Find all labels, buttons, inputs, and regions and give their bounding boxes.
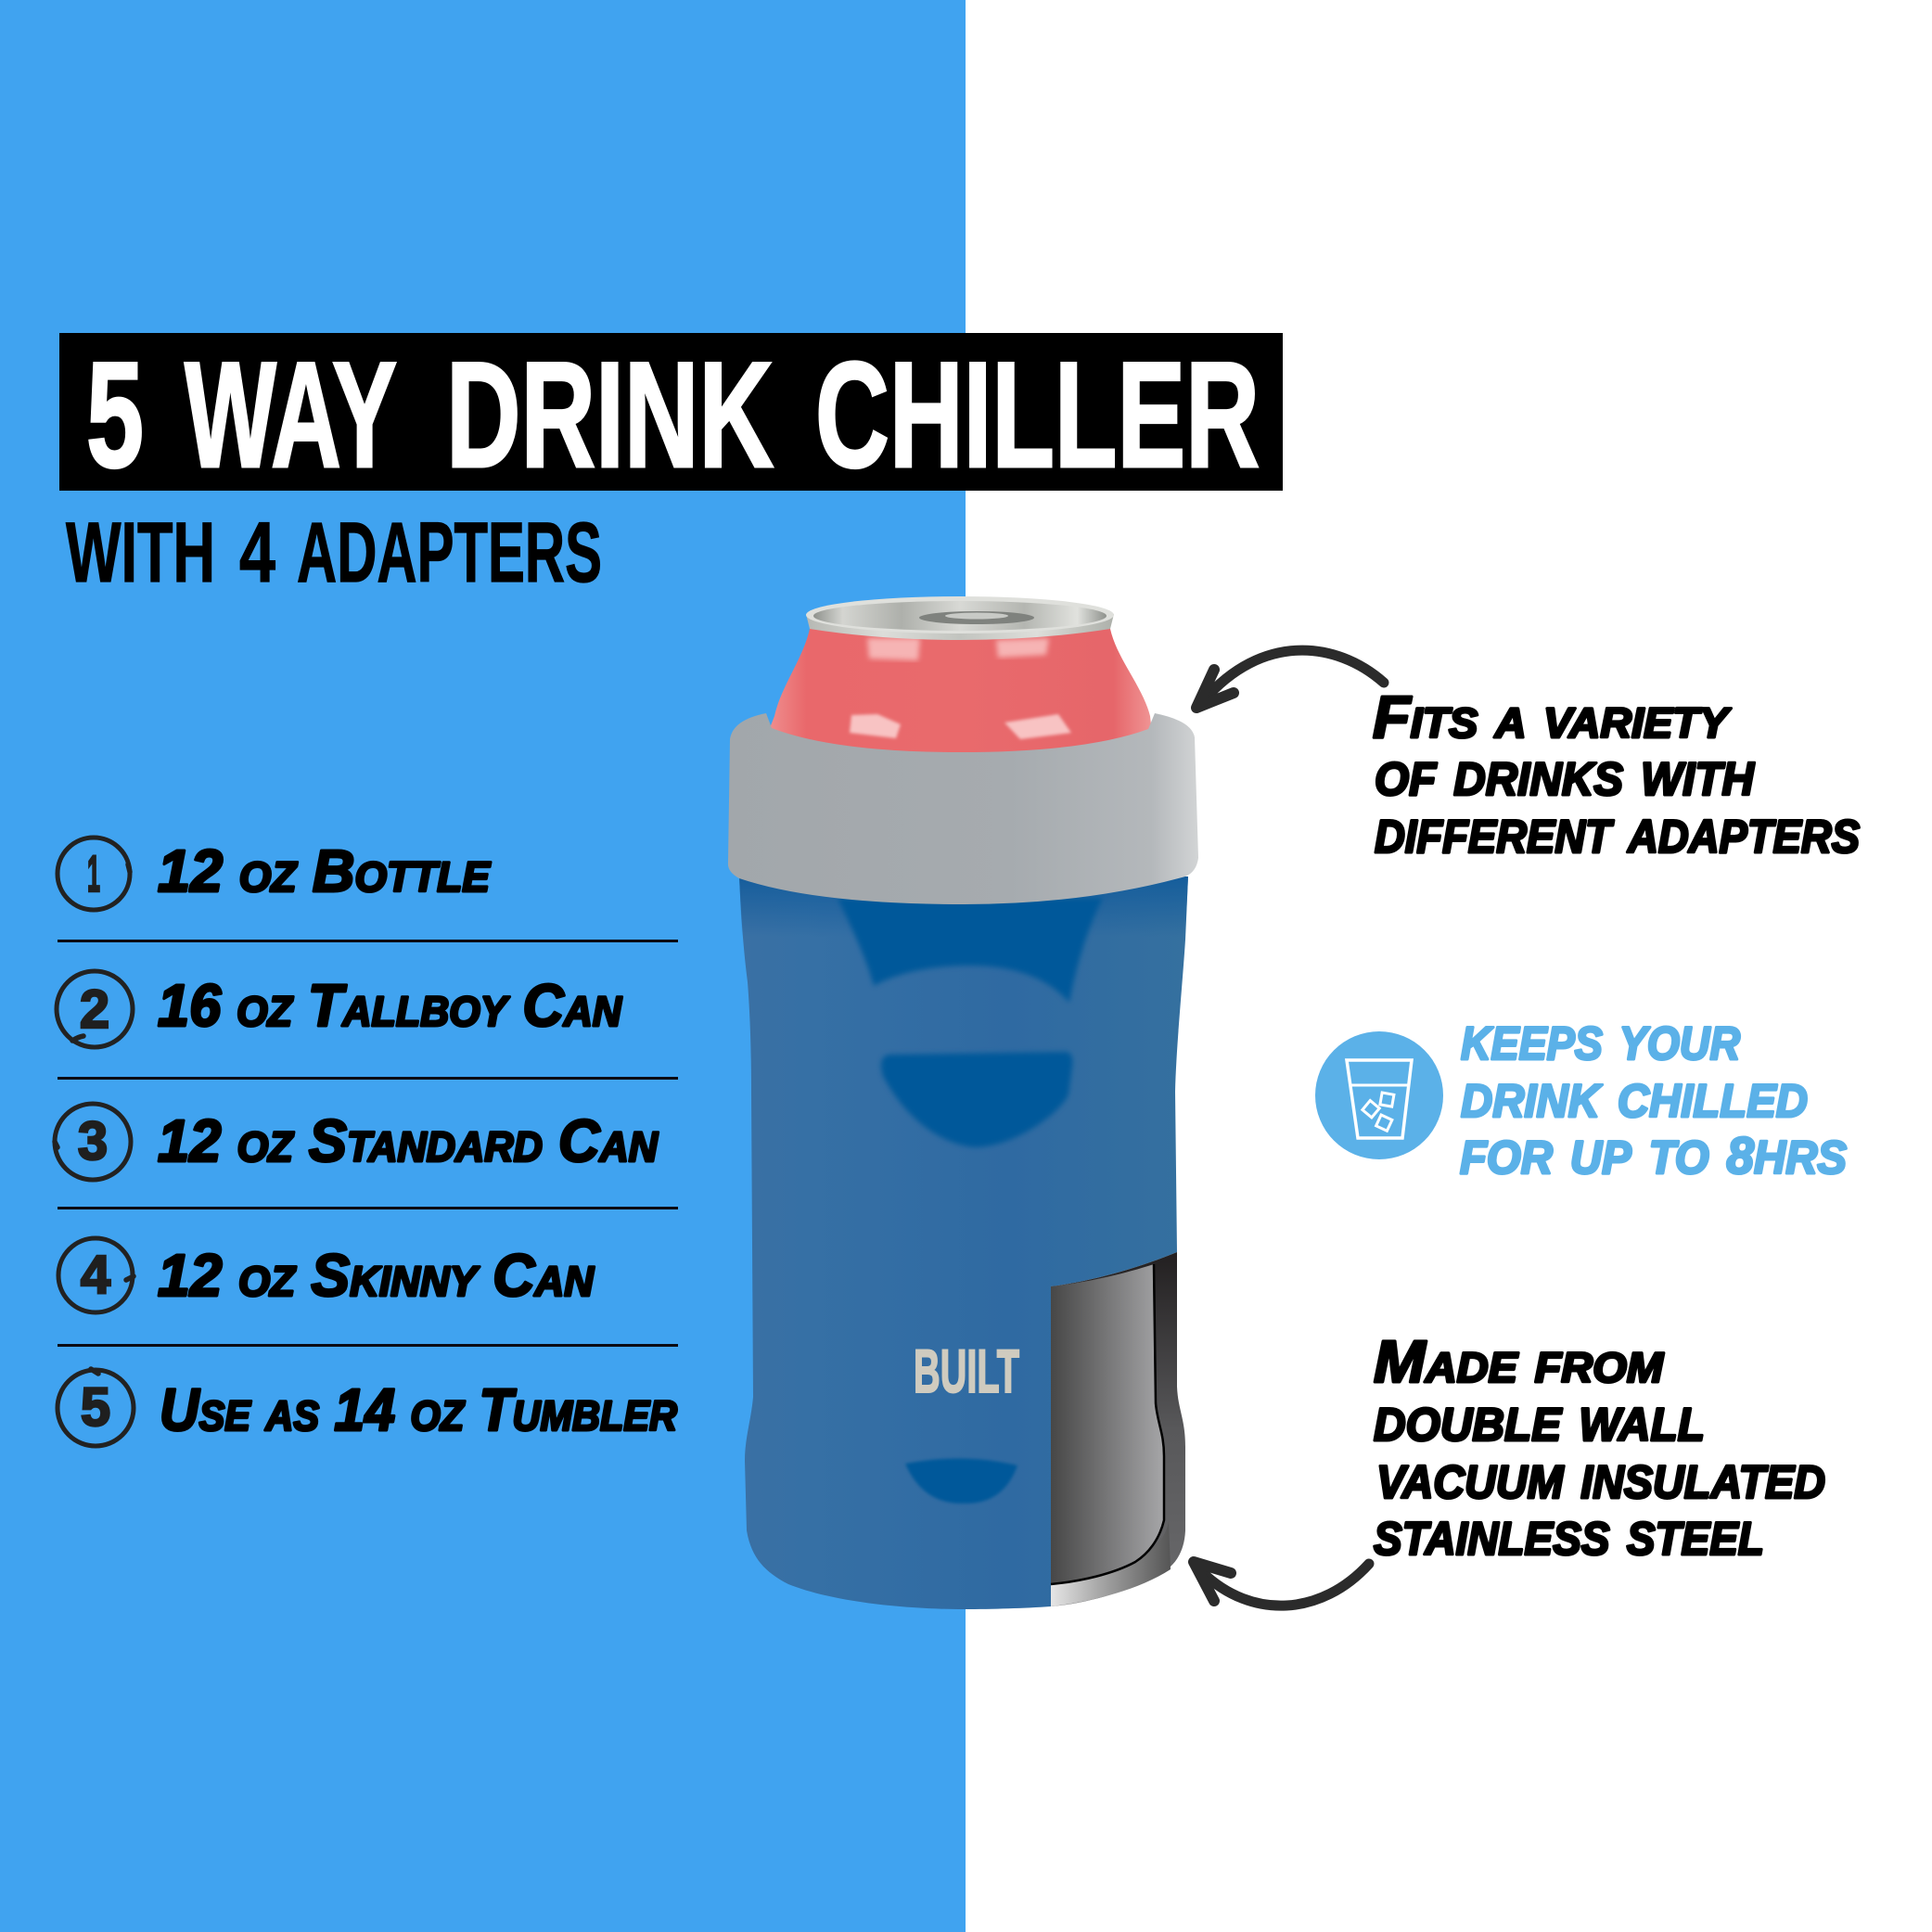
subtitle: 4 [239,505,275,600]
callout: fits a variety [1373,684,1860,867]
callout: fits a variety: of drinks with [1375,736,1755,810]
logo: BUILT [914,1337,1019,1405]
list item 5: 5 [81,1377,110,1438]
product: drink chiller with can [728,596,1198,1609]
can [768,596,1152,756]
list item 5: Use as 14 oz Tumbler [160,1376,677,1443]
list item 1: 12 oz Bottle [158,838,492,904]
list item 2: 2 [80,979,109,1040]
subtitle: WITH [66,505,215,600]
list item 1: 1 [87,844,100,902]
callout: made from [1374,1328,1825,1569]
list item 5 [58,1369,677,1446]
reflection lower [905,1458,1017,1503]
title banner: 5 [86,331,144,499]
panel: size list [55,838,678,1446]
callout: made from: Made from [1374,1328,1665,1395]
reflection arch [838,898,1103,1003]
chiller body [739,876,1188,1609]
callout: made from: vacuum insulated [1376,1439,1825,1513]
callout: fits a variety: Fits a variety [1373,684,1732,750]
list item 3: 3 [78,1111,108,1171]
cutaway inner [1051,1264,1164,1584]
list item 3: 12 oz Standard Can [158,1107,659,1174]
list item 2: 16 oz Tallboy Can [158,972,622,1039]
title banner: CHILLER [815,331,1260,499]
callout: keeps chilled: for up to 8hrs [1460,1114,1847,1188]
title banner: WAY [185,331,397,499]
title banner: DRINK [446,331,774,499]
callout: fits a variety: different adapters [1375,793,1860,867]
subtitle: ADAPTERS [297,505,602,600]
list item 4: 4 [81,1245,110,1305]
title banner [59,331,1283,499]
callout: keeps chilled: keeps your [1461,1000,1740,1074]
reflection middle [881,1052,1072,1147]
icon: glass with ice [1315,1031,1443,1159]
callout: keeps chilled [1460,1000,1847,1188]
adapter [728,713,1198,904]
callout: made from: stainless steel [1374,1495,1764,1569]
arrow: to adapter [1196,650,1384,708]
panel: blue background [0,0,966,1932]
arrow: to steel wall [1194,1562,1369,1606]
reflection band [739,876,1188,937]
callout: keeps chilled: drink chilled [1461,1057,1808,1132]
cutaway wall [1051,1252,1185,1606]
callout: made from: double wall [1374,1381,1705,1455]
list item 4: 12 oz Skinny Can [158,1242,595,1309]
subtitle [66,505,602,600]
